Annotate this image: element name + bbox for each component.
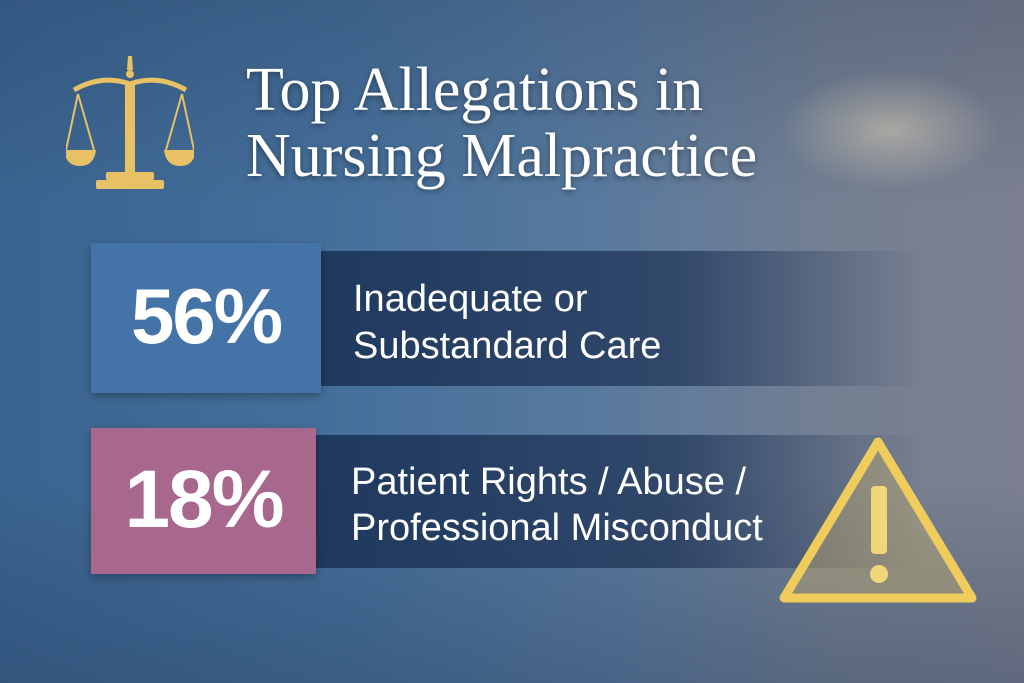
label: Professional Misconduct xyxy=(351,507,763,549)
dark band xyxy=(311,251,921,386)
panel: 18% xyxy=(87,427,888,580)
icon: scales of justice xyxy=(66,56,194,189)
label xyxy=(351,461,763,549)
label: Substandard Care xyxy=(353,325,661,367)
title xyxy=(244,56,758,194)
title: Top Allegations in xyxy=(246,56,703,124)
label: Patient Rights / Abuse / xyxy=(351,461,746,503)
stat box: 56% xyxy=(131,272,281,360)
title: Nursing Malpractice xyxy=(246,122,757,190)
panel: 56% xyxy=(87,242,888,400)
icon: warning triangle xyxy=(780,438,976,602)
dark band xyxy=(311,435,921,568)
label: Inadequate or xyxy=(353,278,588,320)
stat box: 18% xyxy=(124,454,283,545)
stat box xyxy=(91,243,321,393)
label xyxy=(353,278,661,367)
stat box xyxy=(91,428,316,574)
